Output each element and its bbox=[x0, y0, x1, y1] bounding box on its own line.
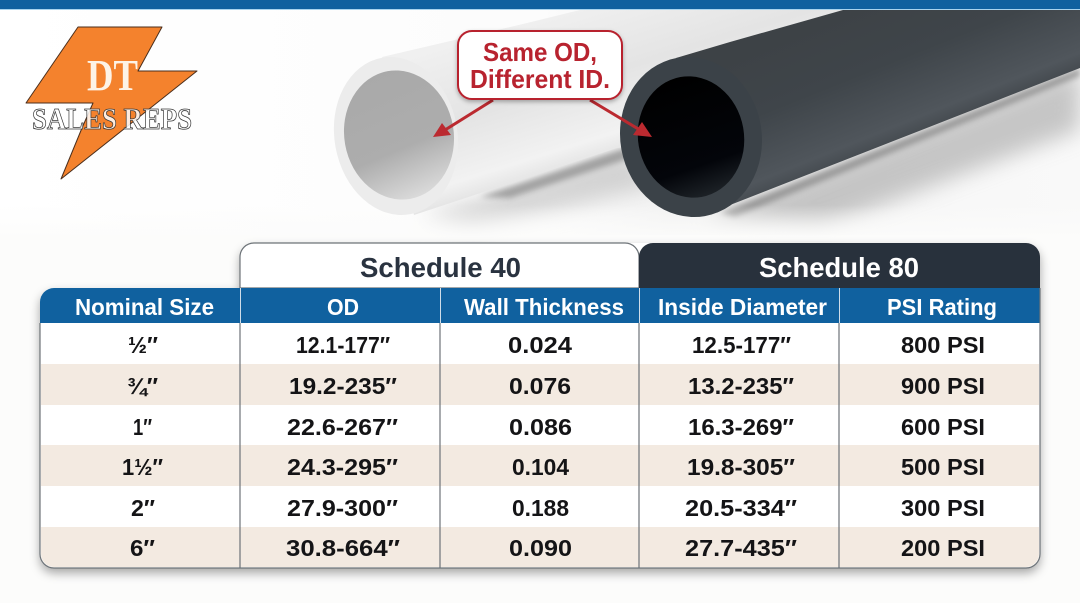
table row: 6 inch: 200 PSI bbox=[901, 535, 985, 561]
table row: 6 inch: 30.8-664″ bbox=[286, 535, 400, 561]
table row: 3/4 inch: ¾″ bbox=[127, 373, 158, 399]
arrow: to dark pipe inner diameter bbox=[590, 100, 652, 137]
table row: 1 inch: 16.3-269″ bbox=[688, 414, 794, 440]
table row: 1 inch: 22.6-267″ bbox=[287, 414, 398, 440]
table row: 3/4 inch: 13.2-235″ bbox=[688, 373, 794, 399]
table row: 3/4 inch: 900 PSI bbox=[901, 373, 985, 399]
panel: comparison table bbox=[40, 243, 1040, 568]
callout: Same OD, Different ID.: Same OD, bbox=[483, 37, 597, 67]
icon: orange lightning bolt bbox=[26, 27, 197, 179]
callout: Same OD, Different ID. bbox=[458, 31, 622, 99]
table row: 1 1/2 inch: 1½″ bbox=[122, 454, 163, 480]
table row: 2 inch: 0.188 bbox=[512, 495, 569, 521]
table row: 2 inch: 2″ bbox=[131, 495, 155, 521]
table row: 2 inch bbox=[41, 486, 1039, 527]
table row: 1/2 inch: 12.1-177″ bbox=[296, 332, 390, 358]
table row: 6 inch: 0.090 bbox=[509, 535, 572, 561]
column header row: Nominal Size bbox=[75, 294, 214, 320]
table row: 1/2 inch: 800 PSI bbox=[901, 332, 985, 358]
table row: 3/4 inch: 19.2-235″ bbox=[289, 373, 397, 399]
column header row: OD bbox=[327, 294, 359, 320]
heading: Schedule 80: Schedule 80 bbox=[759, 252, 919, 283]
table row: 1 inch: 600 PSI bbox=[901, 414, 985, 440]
table row: 2 inch: 20.5-334″ bbox=[685, 495, 797, 521]
callout: Same OD, Different ID.: Different ID. bbox=[470, 64, 610, 94]
table row: 1 1/2 inch bbox=[41, 445, 1039, 486]
table row: 1/2 inch: ½″ bbox=[128, 332, 158, 358]
heading: Schedule 40: Schedule 40 bbox=[360, 252, 521, 283]
table row: 1 inch: 1″ bbox=[133, 414, 152, 440]
column header row: Wall Thickness bbox=[464, 294, 624, 320]
logo text: SALES REPS: SALES REPS bbox=[32, 101, 192, 136]
column header row: PSI Rating bbox=[887, 294, 997, 320]
logo: DT Sales Reps bbox=[26, 27, 197, 179]
table row: 1/2 inch: 12.5-177″ bbox=[692, 332, 791, 358]
arrow: to white pipe inner diameter bbox=[433, 100, 493, 137]
table row: 2 inch: 300 PSI bbox=[901, 495, 985, 521]
table row: 3/4 inch bbox=[41, 364, 1039, 405]
table row: 1/2 inch bbox=[41, 323, 1039, 364]
table row: 6 inch: 6″ bbox=[130, 535, 155, 561]
photo: dark schedule 80 pipe bbox=[607, 10, 1080, 228]
heading: Schedule 80 bbox=[639, 243, 1040, 288]
table row: 6 inch: 27.7-435″ bbox=[685, 535, 797, 561]
table row: 1 1/2 inch: 0.104 bbox=[512, 454, 569, 480]
heading: Schedule 40 bbox=[240, 243, 639, 288]
table row: 1 1/2 inch: 24.3-295″ bbox=[287, 454, 398, 480]
table row: 1 1/2 inch: 19.8-305″ bbox=[687, 454, 795, 480]
top banner bar bbox=[0, 0, 1080, 10]
logo text: DT: DT bbox=[87, 51, 138, 100]
column header row: Inside Diameter bbox=[658, 294, 827, 320]
table row: 1 inch bbox=[41, 405, 1039, 445]
table row: 1/2 inch: 0.024 bbox=[508, 332, 572, 358]
table row: 1 1/2 inch: 500 PSI bbox=[901, 454, 985, 480]
floor shadows under pipes bbox=[0, 68, 1080, 241]
table row: 2 inch: 27.9-300″ bbox=[287, 495, 398, 521]
table grid and outline bbox=[40, 288, 1040, 568]
column header row bbox=[40, 288, 1040, 323]
table row: 3/4 inch: 0.076 bbox=[509, 373, 571, 399]
table row: 6 inch bbox=[41, 527, 1039, 567]
photo: white schedule 40 pipe bbox=[322, 10, 860, 225]
table row: 1 inch: 0.086 bbox=[509, 414, 572, 440]
